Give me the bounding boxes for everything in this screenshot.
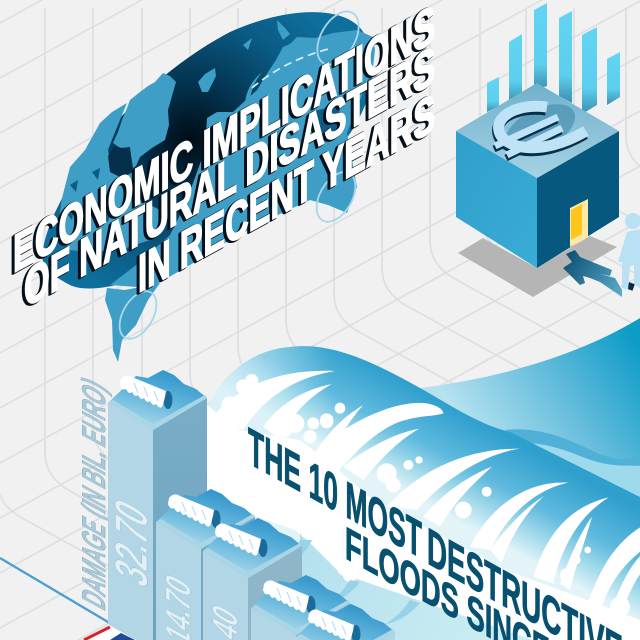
axis line [0, 558, 135, 638]
wave band [505, 429, 640, 466]
back sheet [420, 318, 640, 520]
front wave left highlight [207, 346, 335, 520]
left fingers [210, 371, 363, 473]
icon: globe [42, 4, 375, 362]
globe ocean [42, 12, 372, 288]
bar 5 [296, 604, 395, 640]
bar 1 [106, 370, 207, 640]
globe inland seas [65, 72, 340, 222]
globe route circles [112, 4, 367, 345]
title [13, 0, 435, 320]
white foam band [207, 405, 640, 640]
bar 3 [203, 518, 302, 640]
cube shadow [458, 236, 617, 297]
bar chart behind cube [487, 3, 620, 114]
icon: euro cube with bar chart [456, 3, 640, 297]
white fingers [313, 403, 640, 617]
icon: UK flag [84, 627, 135, 640]
water streaks [277, 540, 420, 624]
bar 2 [156, 489, 255, 640]
back sheet lower area [530, 443, 640, 500]
foam bubbles [300, 519, 366, 582]
person standing [618, 213, 640, 290]
front wave [207, 346, 640, 640]
globe land [58, 20, 375, 362]
wave [207, 318, 640, 640]
value: 32.70 [106, 490, 157, 596]
euro symbol [494, 94, 586, 164]
bar 4 [251, 575, 350, 640]
door [570, 199, 588, 247]
cube faces [456, 131, 537, 268]
axis label: DAMAGE (IN BIL. EURO) [75, 371, 112, 616]
person shadow [563, 250, 622, 297]
lower water [300, 533, 533, 640]
